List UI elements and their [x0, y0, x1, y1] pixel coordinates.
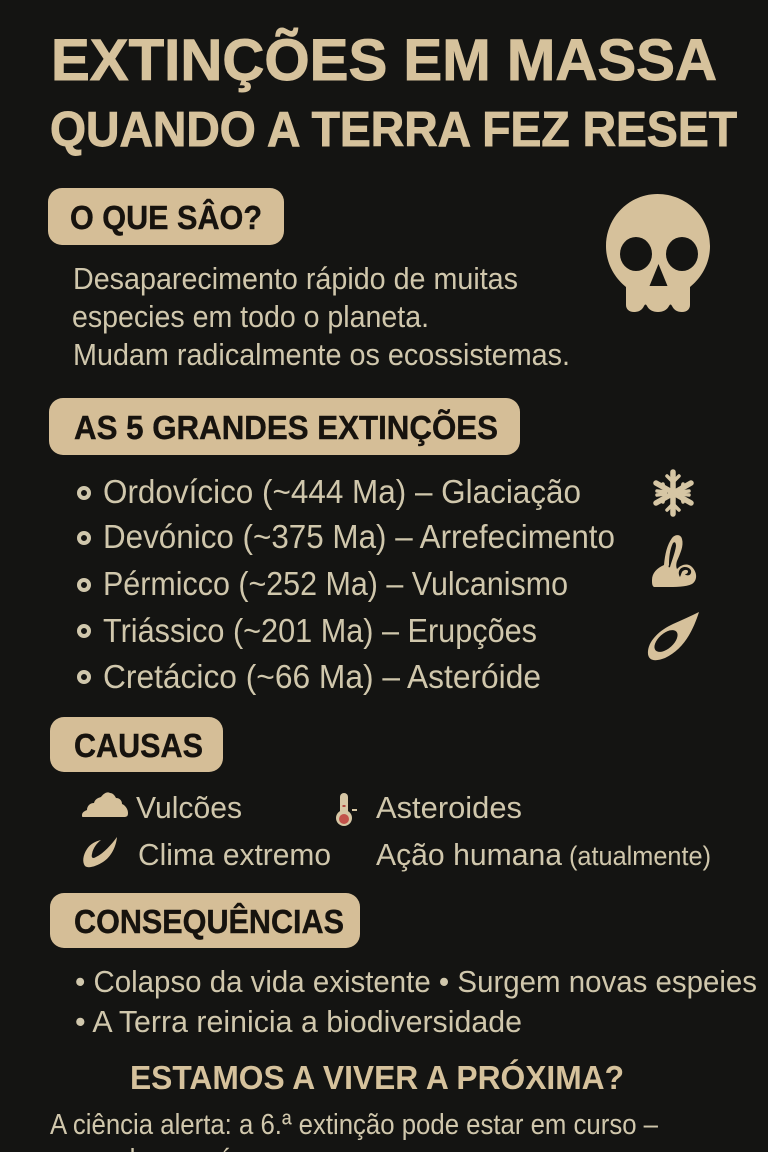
icon: asteroid	[648, 612, 699, 660]
text block: definition	[72, 261, 570, 372]
list: extinctions: Cretácico (~66 Ma) – Asteróide	[103, 658, 541, 695]
text: ação humana: (atualmente)	[569, 841, 711, 871]
icon: snowflake	[656, 472, 691, 514]
panel: consequências	[50, 893, 757, 1039]
icon: cloud	[82, 792, 128, 817]
heading: causas	[50, 717, 223, 772]
heading: as 5 grandes extinções: AS 5 GRANDES EXTINÇÕES	[74, 409, 498, 446]
title	[50, 28, 737, 157]
icon: eruption plume	[652, 535, 696, 587]
text block: definition: Mudam radicalmente os ecossistemas.	[73, 337, 570, 372]
title: QUANDO A TERRA FEZ RESET	[50, 103, 737, 157]
heading: o que são: O QUE SÂO?	[70, 199, 262, 236]
panel: o que são	[48, 188, 710, 372]
heading: o que são	[48, 188, 284, 245]
text: ação humana: Ação humana	[376, 837, 563, 872]
icon: thermometer	[336, 793, 357, 826]
list: extinctions: Devónico (~375 Ma) – Arrefecimento	[103, 518, 615, 555]
heading: causas: CAUSAS	[74, 727, 203, 764]
text: asteroides: Asteroides	[376, 790, 522, 825]
heading: estamos a viver a próxima: ESTAMOS A VIVER A PRÓXIMA?	[130, 1059, 624, 1096]
text block: definition: Desaparecimento rápido de muitas	[73, 261, 518, 296]
panel: causas	[50, 717, 711, 872]
text: ação humana	[376, 837, 711, 872]
list: extinctions	[79, 473, 615, 695]
icon: skull	[606, 194, 710, 312]
text block: consequences	[75, 964, 757, 1039]
text block: definition: especies em todo o planeta.	[72, 299, 429, 334]
text: clima extremo: Clima extremo	[138, 837, 331, 872]
text block: closing: A ciência alerta: a 6.ª extinção pode estar em curso –	[50, 1109, 659, 1141]
list: extinctions: Pérmicco (~252 Ma) – Vulcanismo	[103, 565, 568, 602]
icon: comet swoosh	[83, 837, 117, 867]
text block: closing	[50, 1109, 659, 1152]
text block: consequences: • A Terra reinicia a biodiversidade	[75, 1004, 522, 1039]
title: EXTINÇÕES EM MASSA	[51, 28, 717, 93]
heading: consequências: CONSEQUÊNCIAS	[74, 903, 344, 940]
list: extinctions: Triássico (~201 Ma) – Erupções	[103, 612, 537, 649]
heading: consequências	[50, 893, 360, 948]
list: extinctions: Ordovícico (~444 Ma) – Glaciação	[103, 473, 581, 510]
panel: as 5 grandes extinções	[49, 398, 699, 695]
heading: as 5 grandes extinções	[49, 398, 520, 455]
text: vulcões: Vulcões	[136, 790, 242, 825]
